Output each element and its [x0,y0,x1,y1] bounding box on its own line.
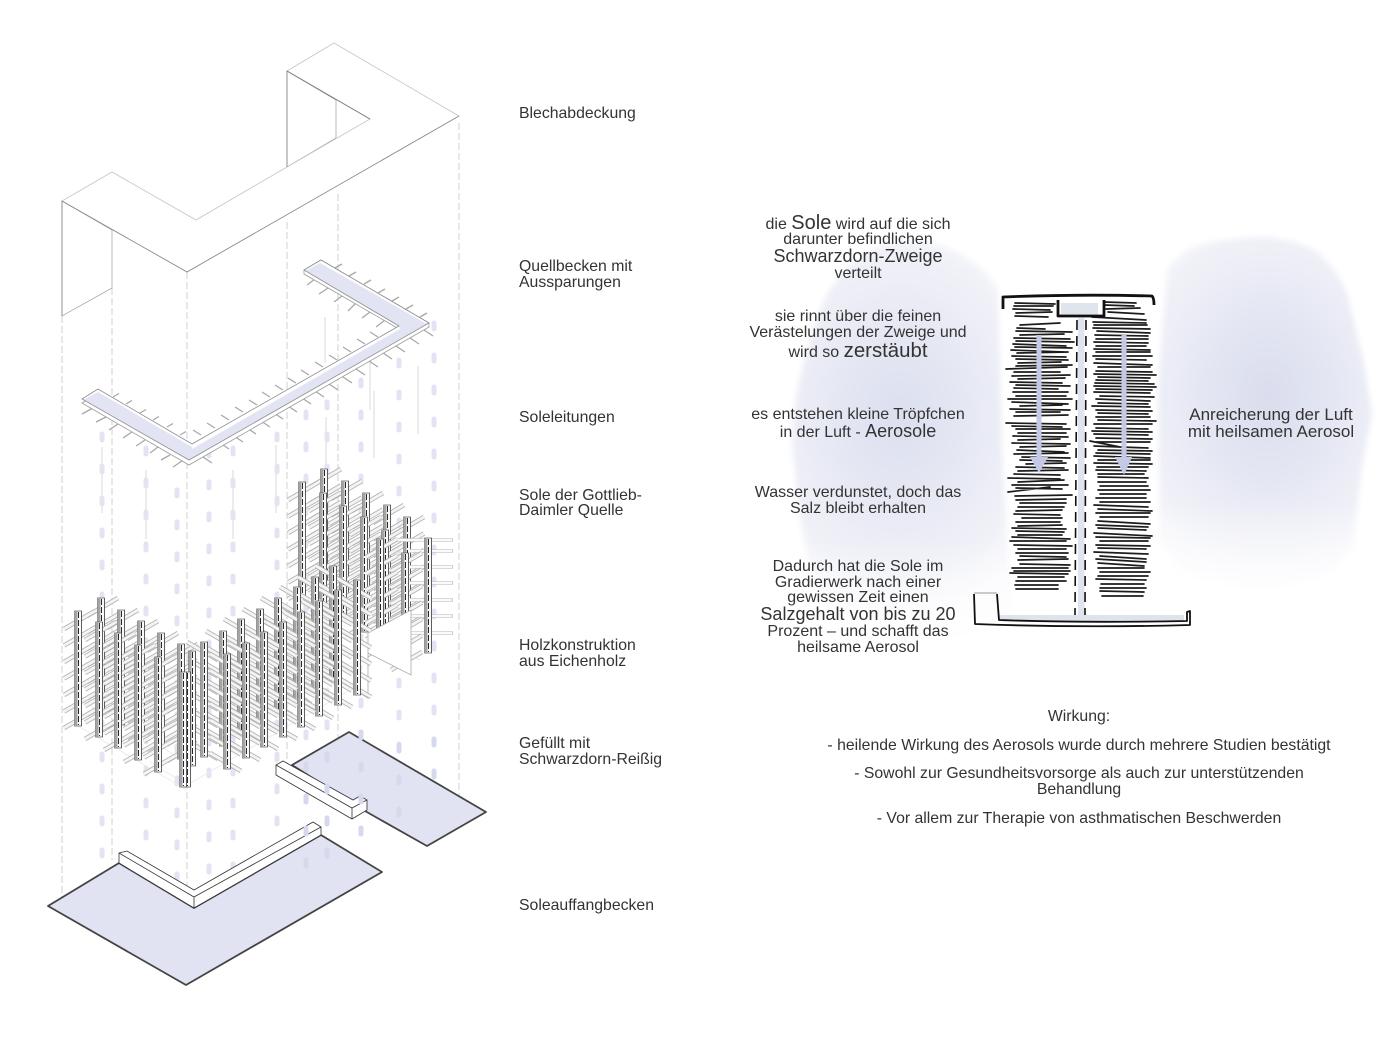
text: air enrichment: mit heilsamen Aerosol [1188,422,1354,441]
layer labels: Schwarzdorn-Reißig [519,751,662,768]
text: salt content: Gradierwerk nach einer [775,574,942,591]
dashed frame lines [1075,320,1086,615]
twig scribbles, right [1090,302,1156,596]
text: air enrichment [1188,405,1354,441]
brine surface [82,260,429,460]
source basin with recesses [82,260,433,467]
effect text [827,708,1331,827]
text: evaporation: Wasser verdunstet, doch das [755,484,961,501]
inner walls [82,260,429,449]
text: droplets: in der Luft - Aerosole [780,421,936,441]
layer labels: Soleleitungen [519,409,615,426]
basin [48,835,382,985]
dashed vertical guide lines [62,123,459,968]
brine pipes, faint vertical streams [102,317,418,539]
right wing posts [187,566,371,771]
text: droplets [751,406,965,441]
flow arrows [1030,335,1132,475]
effect text: - Vor allem zur Therapie von asthmatischen Beschwerden [877,810,1281,827]
twig scribbles, left [1006,303,1074,589]
droplets over collection basin [306,732,434,868]
text: salt content: Dadurch hat die Sole im [773,558,943,575]
text: brine distribution: Schwarzdorn-Zweige [773,246,943,266]
layer labels: aus Eichenholz [519,653,626,670]
upper posts [288,469,453,670]
falling brine droplets [102,323,434,914]
text: evaporation: Salz bleibt erhalten [790,500,926,517]
text: atomisation [749,308,967,362]
text: atomisation: Verästelungen der Zweige und [749,324,967,341]
layer labels: Gefüllt mit [519,735,591,752]
aerosol glow, left [780,240,1020,650]
corner posts [180,651,196,787]
basin body [82,260,429,465]
text: salt content: gewissen Zeit einen [787,589,929,606]
text: atomisation: sie rinnt über die feinen [775,308,941,325]
layer labels [519,105,662,914]
aerosol glow, right [1150,237,1385,600]
basin wall [119,822,321,908]
text: air enrichment: Anreicherung der Luft [1189,405,1353,424]
bottom basin [999,615,1184,622]
basin wall [276,761,367,819]
text: salt content: heilsame Aerosol [797,639,919,656]
rib ticks [82,264,433,467]
brine collection basin, right part [276,732,486,846]
text: evaporation [755,484,961,517]
effect text: Behandlung [1037,781,1121,798]
sheet metal cover [62,43,459,316]
white panel below upper posts [358,610,411,698]
effect text: Wirkung: [1048,708,1110,725]
explanatory texts [749,212,1354,656]
layer labels: Soleauffangbecken [519,897,654,914]
brine collection basin, left part [48,822,382,985]
effect text: - heilende Wirkung des Aerosols wurde durch mehrere Studien bestätigt [827,737,1331,754]
text: brine distribution: die Sole wird auf die sich [766,212,950,234]
text: brine distribution [766,212,950,282]
top basin [1061,303,1098,315]
faint floor lines [78,600,420,790]
layer labels: Quellbecken mit [519,258,633,275]
basin [292,732,486,846]
text: salt content [760,558,956,656]
horizontal rails of the free-standing post [396,540,453,633]
effect text: - Sowohl zur Gesundheitsvorsorge als auch zur unterstützenden [854,765,1304,782]
text: salt content: Prozent – und schafft das [767,623,949,640]
text: droplets: es entstehen kleine Tröpfchen [751,406,965,423]
layer labels: Blechabdeckung [519,105,636,122]
text: brine distribution: darunter befindlichen [783,231,933,248]
text: atomisation: wird so zerstäubt [788,340,928,362]
layer labels: Sole der Gottlieb- [519,487,642,504]
layer labels: Holzkonstruktion [519,637,636,654]
section diagram of graduation tower [974,295,1190,626]
central brine stripe [1078,318,1084,616]
roof line [1003,295,1154,316]
timber construction of oak [64,469,453,790]
layer labels: Aussparungen [519,274,621,291]
text: brine distribution: verteilt [834,265,882,282]
layer labels: Daimler Quelle [519,502,624,519]
text: salt content: Salzgehalt von bis zu 20 [760,604,956,624]
left wing posts [64,598,198,774]
